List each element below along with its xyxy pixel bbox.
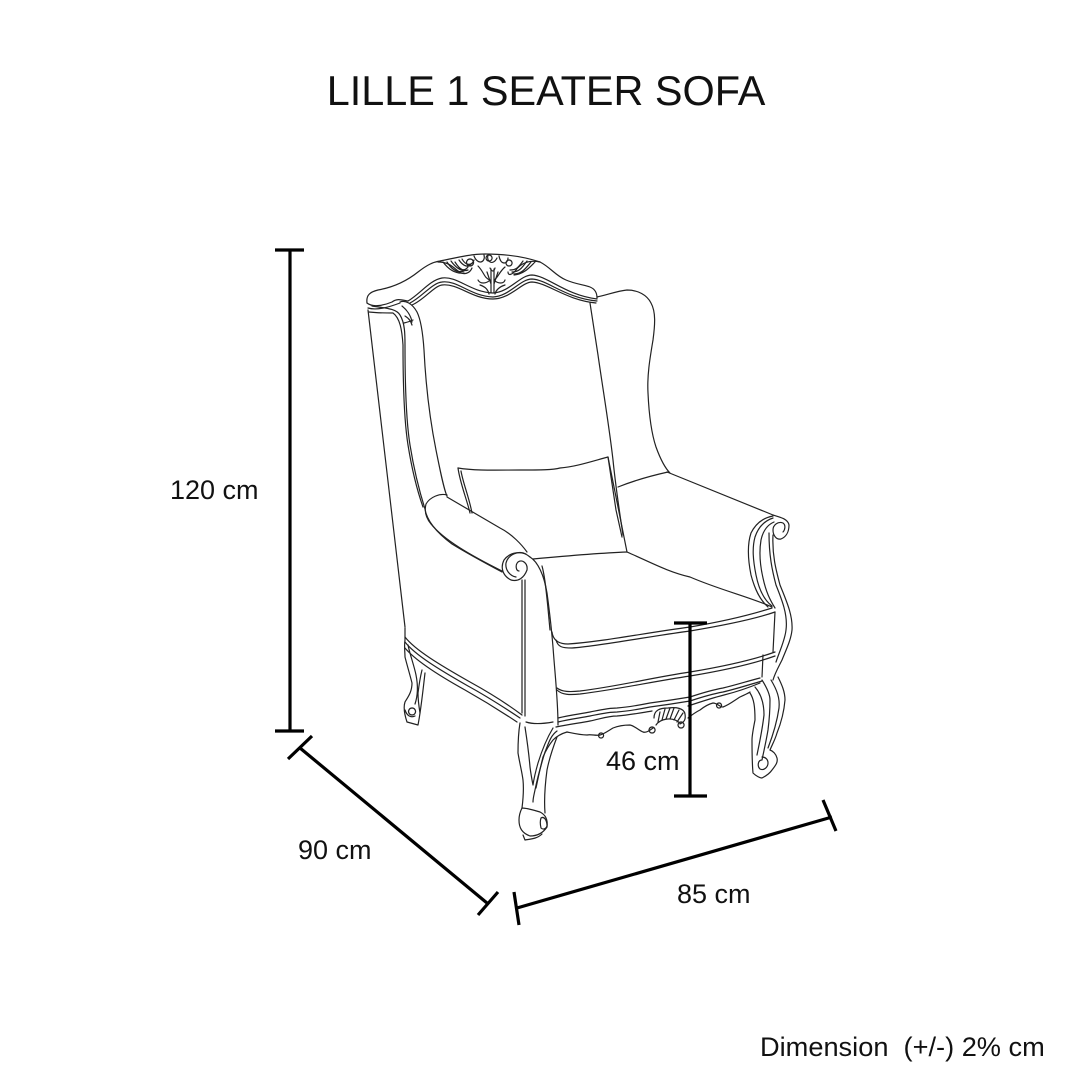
chair: right arm with scrolled column — [667, 472, 792, 680]
dimension: seat height 46 cm: 46 cm — [606, 746, 680, 776]
chair: right wing — [590, 290, 670, 535]
title: LILLE 1 SEATER SOFA — [327, 68, 766, 114]
dimension: width 85 cm — [514, 800, 836, 925]
chair: back left leg — [404, 628, 425, 725]
chair: left wing and back — [368, 301, 447, 627]
dimension: seat height 46 cm — [606, 623, 707, 796]
chair: front and side seat rails — [405, 637, 762, 735]
chair: front left leg — [518, 722, 567, 840]
chair: seat cushion — [552, 552, 775, 695]
chair: carved crest ornament — [438, 255, 540, 294]
chair: top crest rail — [367, 254, 597, 309]
chair: back cushion pillow — [458, 457, 627, 559]
chair: left arm front column — [522, 557, 558, 725]
dimension: height 120 cm — [170, 250, 304, 731]
dimension: height 120 cm: 120 cm — [170, 475, 259, 505]
dimension: depth 90 cm: 90 cm — [298, 835, 372, 865]
chair: shell carving — [599, 703, 722, 738]
chair: front right leg — [750, 677, 785, 778]
chair: left arm with scroll — [425, 494, 530, 581]
illustration: wing chair line drawing — [367, 254, 792, 840]
dimension: depth 90 cm — [288, 736, 498, 915]
footnote: dimension tolerance: Dimension (+/-) 2% cm — [760, 1031, 1045, 1062]
dimension: width 85 cm: 85 cm — [677, 879, 751, 909]
